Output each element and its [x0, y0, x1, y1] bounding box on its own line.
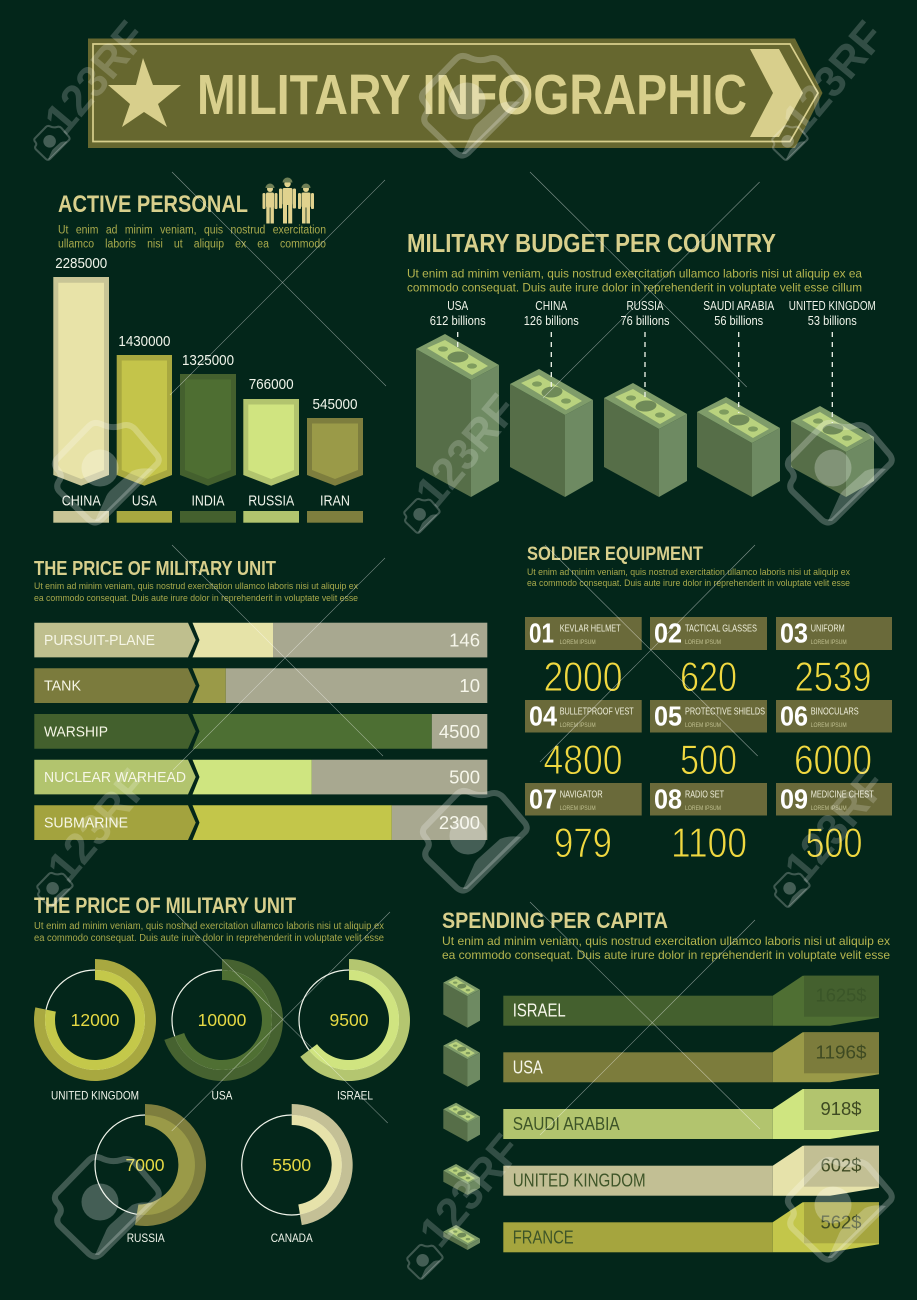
item 07: LOREM IPSUM — [560, 805, 596, 812]
watermarks: 123RF — [773, 12, 894, 143]
donut: United Kingdom: 12000 — [71, 1010, 120, 1030]
bar row: submarine: 2300 — [439, 812, 480, 833]
item 07: NAVIGATOR — [560, 790, 603, 801]
donut: Russia: RUSSIA — [127, 1231, 165, 1245]
money stack: USA: USA — [447, 299, 469, 313]
icon: money stack medium — [443, 1039, 480, 1087]
bar: Iran — [307, 396, 363, 523]
bar: Iran: IRAN — [320, 493, 350, 510]
bar row: nuclear warhead: NUCLEAR WARHEAD — [44, 769, 186, 786]
description text: Ut enim ad minim veniam, quis nostrud exercitation ullamco laboris nisi ut aliquip ex — [527, 567, 850, 577]
ribbon: USA: USA — [513, 1057, 543, 1077]
ribbon: United Kingdom: 602$ — [820, 1156, 862, 1176]
icon: money stack smallest — [443, 1225, 480, 1250]
title text: MILITARY INFOGRAPHIC — [197, 63, 747, 127]
item 04: 04 — [529, 701, 557, 732]
item 06: 6000 — [794, 736, 872, 783]
money stack: United Kingdom: UNITED KINGDOM — [789, 299, 876, 313]
bar row: submarine — [34, 805, 487, 840]
donut: USA — [164, 959, 283, 1103]
watermarks: 123RF — [775, 760, 896, 891]
description text: ullamco laboris nisi ut aliquip ex ea commodo — [58, 238, 326, 250]
money stack: China: 126 billions — [524, 314, 579, 328]
ribbon: USA: 1196$ — [816, 1042, 866, 1062]
donut: Canada: CANADA — [271, 1231, 313, 1245]
title banner — [88, 38, 822, 148]
panel: price of military unit donuts — [34, 893, 410, 1245]
item 06: 06 — [780, 701, 808, 732]
item 01: 2000 — [544, 653, 622, 700]
ribbon: United Kingdom: UNITED KINGDOM — [513, 1171, 646, 1191]
description text — [407, 266, 862, 294]
description text — [34, 581, 358, 604]
ribbon: France: FRANCE — [513, 1227, 574, 1247]
ribbon: France: 562$ — [820, 1212, 862, 1232]
donut: Israel: 9500 — [330, 1010, 369, 1030]
item 09: 500 — [806, 819, 862, 866]
donut: Israel: ISRAEL — [337, 1089, 373, 1103]
money stack: Russia — [604, 299, 687, 497]
panel: spending per capita — [442, 908, 890, 1252]
money stack: United Kingdom — [789, 299, 876, 497]
item 05: LOREM IPSUM — [685, 722, 721, 729]
heading: spending per capita: SPENDING PER CAPITA — [442, 908, 668, 933]
item 03: UNIFORM — [811, 624, 845, 635]
bar: USA — [117, 333, 172, 523]
description text: commodo consequat. Duis aute irure dolor in reprehenderit in voluptate velit esse cillum — [407, 280, 862, 294]
panel: military budget per country — [407, 228, 876, 497]
item 02 — [650, 617, 767, 700]
heading: military budget: MILITARY BUDGET PER COUNTRY — [407, 228, 776, 258]
bar row: tank — [34, 668, 487, 703]
bar row: warship: WARSHIP — [44, 723, 108, 740]
description text: ea commodo consequat. Duis aute irure dolor in reprehenderit in voluptate velit esse — [34, 593, 358, 604]
item 07: 07 — [529, 784, 557, 815]
donut: USA: USA — [212, 1089, 232, 1103]
bar: USA: USA — [132, 493, 157, 510]
description text: Ut enim ad minim veniam, quis nostrud exercitation — [58, 224, 326, 236]
watermarks: 123RF — [38, 760, 159, 891]
bar row: nuclear warhead: 500 — [449, 766, 480, 788]
ribbon: Israel: ISRAEL — [513, 1001, 566, 1021]
item 03: 03 — [780, 618, 808, 649]
heading: soldier equipment: SOLDIER EQUIPMENT — [527, 544, 703, 565]
item 08: LOREM IPSUM — [685, 805, 721, 812]
donut: Israel — [299, 959, 410, 1103]
bar: Russia: 766000 — [249, 376, 294, 393]
donut: Russia — [95, 1104, 206, 1245]
money stack: Saudi Arabia — [697, 299, 780, 497]
item 07 — [525, 783, 642, 866]
ribbon: Saudi Arabia: 918$ — [820, 1099, 862, 1119]
item 02: 620 — [680, 653, 737, 700]
item 03: 2539 — [794, 653, 872, 700]
item 04: BULLETPROOF VEST — [560, 707, 634, 718]
money stack: USA: 612 billions — [430, 314, 486, 328]
money stack: Saudi Arabia: SAUDI ARABIA — [703, 299, 775, 313]
bar: China: CHINA — [62, 493, 101, 510]
donut: USA: 10000 — [198, 1010, 247, 1030]
item 04: 4800 — [544, 736, 622, 783]
ribbon: USA — [503, 1032, 879, 1082]
item 07: 979 — [554, 819, 612, 866]
donut: Russia: 7000 — [126, 1155, 165, 1175]
item 08: 08 — [654, 784, 682, 815]
icon: money stack smaller — [443, 1164, 480, 1195]
description text: ea commodo consequat. Duis aute irure dolor in reprehenderit in voluptate velit esse — [34, 933, 384, 944]
bar: Iran: 545000 — [312, 396, 358, 413]
bar: China: 2285000 — [55, 255, 107, 272]
donut: Canada: 5500 — [272, 1155, 311, 1175]
money stack: China — [510, 299, 593, 497]
item 09 — [776, 783, 892, 866]
description text: Ut enim ad minim veniam, quis nostrud exercitation ullamco laboris nisi ut aliquip ex ea — [407, 266, 862, 280]
ribbon: Israel — [503, 976, 879, 1026]
item 01: KEVLAR HELMET — [560, 624, 621, 635]
description text — [34, 921, 384, 944]
bar: USA: 1430000 — [118, 333, 170, 350]
item 02: LOREM IPSUM — [685, 639, 721, 646]
description text — [527, 567, 850, 588]
bar row: tank: TANK — [44, 678, 81, 695]
watermarks: 123RF — [406, 385, 527, 516]
bar: India: INDIA — [192, 493, 224, 510]
bar row: pursuit-plane: PURSUIT-PLANE — [44, 632, 155, 649]
description text: Ut enim ad minim veniam, quis nostrud exercitation ullamco laboris nisi ut aliquip ex — [442, 934, 890, 948]
panel: active personal — [53, 178, 363, 523]
item 08: 1100 — [671, 819, 747, 866]
item 06: BINOCULARS — [811, 707, 859, 718]
item 02: TACTICAL GLASSES — [685, 624, 757, 635]
item 09: MEDICINE CHEST — [811, 790, 874, 801]
ribbon: Saudi Arabia — [503, 1089, 879, 1139]
money stack: United Kingdom: 53 billions — [808, 314, 857, 328]
donut: United Kingdom: UNITED KINGDOM — [51, 1089, 139, 1103]
item 08 — [650, 783, 767, 866]
icon: money stack large — [443, 976, 480, 1028]
item 05 — [650, 700, 767, 783]
item 09: LOREM IPSUM — [811, 805, 847, 812]
item 01: LOREM IPSUM — [560, 639, 596, 646]
money stack: Russia: RUSSIA — [626, 299, 664, 313]
item 06: LOREM IPSUM — [811, 722, 847, 729]
bar row: submarine: SUBMARINE — [44, 815, 128, 832]
bar: India: 1325000 — [182, 352, 234, 369]
item 09: 09 — [780, 784, 808, 815]
donut: United Kingdom — [34, 959, 156, 1103]
donut: Canada — [242, 1104, 353, 1245]
bar row: warship — [34, 714, 487, 749]
icon: chevron arrow — [750, 49, 803, 137]
item 05: 500 — [680, 736, 737, 783]
panel: soldier equipment — [525, 544, 892, 866]
ribbon: Israel: 1625$ — [816, 986, 866, 1006]
watermarks: 123RF — [35, 12, 156, 143]
money stack: Saudi Arabia: 56 billions — [714, 314, 763, 328]
item 02: 02 — [654, 618, 682, 649]
panel: price of military unit bars — [34, 558, 487, 840]
item 04: LOREM IPSUM — [560, 722, 596, 729]
description text: Ut enim ad minim veniam, quis nostrud exercitation ullamco laboris nisi ut aliquip ex — [34, 581, 358, 592]
money stack: Russia: 76 billions — [620, 314, 670, 328]
heading: active personal: ACTIVE PERSONAL — [58, 191, 248, 218]
money stack: China: CHINA — [535, 299, 568, 313]
icon: star — [108, 58, 181, 127]
bar row: tank: 10 — [459, 675, 480, 696]
icon: money stack small — [443, 1103, 480, 1142]
description text: ea commodo consequat. Duis aute irure dolor in reprehenderit in voluptate velit esse — [527, 578, 850, 588]
bar: Russia: RUSSIA — [248, 493, 294, 510]
description text: Ut enim ad minim veniam, quis nostrud exercitation ullamco laboris nisi ut aliquip ex — [34, 921, 384, 932]
heading: price of military unit: THE PRICE OF MILITARY UNIT — [34, 558, 276, 580]
item 03: LOREM IPSUM — [811, 639, 847, 646]
item 01: 01 — [529, 618, 554, 649]
item 05: PROTECTIVE SHIELDS — [685, 707, 765, 718]
bar row: nuclear warhead — [34, 760, 487, 794]
item 06 — [776, 700, 892, 783]
heading: price of military unit donuts: THE PRICE OF MILITARY UNIT — [34, 893, 296, 918]
icon: three soldiers — [262, 178, 314, 224]
bar: India — [180, 352, 236, 523]
ribbon: Saudi Arabia: SAUDI ARABIA — [513, 1114, 620, 1134]
item 04 — [525, 700, 642, 783]
watermarks: 123RF — [410, 1125, 531, 1256]
bar row: pursuit-plane: 146 — [449, 630, 480, 650]
description text: ea commodo consequat. Duis aute irure dolor in reprehenderit in voluptate velit esse — [442, 948, 890, 962]
description text — [58, 224, 326, 250]
bar row: pursuit-plane — [34, 623, 487, 657]
ribbon: France — [503, 1202, 879, 1252]
bar: Russia — [243, 376, 299, 523]
ribbon: United Kingdom — [503, 1146, 879, 1196]
item 05: 05 — [654, 701, 682, 732]
bar: China — [53, 255, 109, 523]
item 08: RADIO SET — [685, 790, 724, 801]
bar row: warship: 4500 — [439, 721, 480, 742]
item 01 — [525, 617, 642, 700]
money stack: USA — [416, 299, 499, 497]
description text — [442, 934, 890, 962]
item 03 — [776, 617, 892, 700]
